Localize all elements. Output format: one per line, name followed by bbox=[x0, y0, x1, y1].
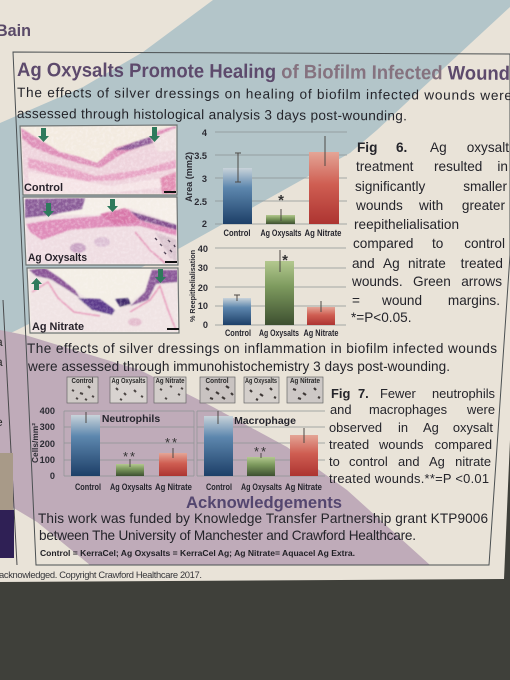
figure 6 caption bbox=[351, 140, 509, 325]
bar chart: neutrophils bbox=[30, 406, 194, 492]
figure 7 caption: treated bbox=[329, 437, 369, 452]
figure 6 caption: control bbox=[464, 236, 505, 251]
bar chart: reepithelialisation: * bbox=[282, 252, 288, 269]
bar chart: neutrophils: 100 bbox=[40, 455, 55, 465]
figure 6 caption: to bbox=[432, 236, 443, 251]
histology labels bbox=[24, 182, 87, 333]
bar chart: reepithelialisation: Ag Oxysalts bbox=[259, 328, 299, 338]
bar chart: neutrophils: Control bbox=[75, 482, 101, 492]
figure 6 caption: in bbox=[497, 159, 508, 174]
bar chart: neutrophils: 400 bbox=[40, 406, 55, 416]
bar chart: reepithelialisation: 20 bbox=[198, 283, 208, 293]
acknowledgements heading: Acknowledgements bbox=[186, 494, 342, 512]
bar chart: neutrophils: Neutrophils bbox=[102, 413, 160, 425]
main panel frame bbox=[13, 52, 510, 565]
acknowledgements text: between The University of Manchester and Crawford Healthcare. bbox=[39, 528, 416, 543]
figure 6 caption: Ag bbox=[430, 140, 447, 155]
histology image: ag oxysalts bbox=[23, 197, 178, 265]
bar chart: reepithelialisation: 40 bbox=[198, 244, 208, 254]
bar chart: reepithelialisation bbox=[188, 244, 346, 338]
figure 6 caption: reepithelialisation bbox=[354, 217, 459, 232]
bar chart: wound area: 2.5 bbox=[194, 197, 207, 207]
bar chart: wound area: Ag Nitrate bbox=[304, 228, 342, 238]
micrographs: neutrophils bbox=[67, 377, 186, 403]
bar chart: neutrophils: ** bbox=[123, 449, 137, 464]
micrographs: macrophages bbox=[200, 377, 323, 403]
histology labels: Ag Nitrate bbox=[32, 321, 84, 333]
histology image: control bbox=[20, 125, 178, 196]
figure 7 caption: and bbox=[398, 454, 420, 469]
bar chart: macrophage: Ag Nitrate bbox=[285, 482, 322, 492]
micrographs: macrophages: Ag Oxysalts bbox=[245, 378, 277, 385]
bar chart: wound area: 3.5 bbox=[194, 151, 207, 161]
figure 7 caption: Ag bbox=[429, 454, 445, 469]
figure 6 caption: arrows bbox=[461, 274, 502, 289]
bar chart: wound area: 4 bbox=[202, 128, 208, 138]
bar chart: wound area: Ag Oxysalts bbox=[260, 228, 302, 238]
figure 6 caption: with bbox=[418, 198, 443, 213]
acknowledgements text: This work was funded by Knowledge Transfer Partnership grant KTP9006 bbox=[38, 511, 488, 526]
histology labels: Control bbox=[24, 182, 63, 194]
scale bars bbox=[164, 191, 179, 330]
figure 7 caption: macrophages bbox=[369, 402, 447, 417]
intro text: histological analysis: assessed through histological analysis 3 days post-wounding. bbox=[17, 106, 407, 123]
figure 6 caption: significantly bbox=[355, 179, 425, 194]
figure 6 caption: Ag bbox=[383, 256, 400, 271]
bar chart: wound area: 2 bbox=[202, 219, 207, 229]
bar chart: neutrophils: Ag Nitrate bbox=[155, 482, 192, 492]
intro text: immunohistochemistry: were assessed through immunohistochemistry 3 days post-wounding. bbox=[27, 359, 450, 374]
figure 7 caption: oxysalt bbox=[453, 420, 493, 435]
bar chart: reepithelialisation: 30 bbox=[198, 263, 208, 273]
figure 6 caption: Green bbox=[413, 274, 451, 289]
figure 6 caption: treatment bbox=[356, 159, 414, 174]
histology labels: Ag Oxysalts bbox=[28, 252, 87, 264]
figure 6 caption: compared bbox=[353, 236, 413, 251]
dressing key: Control = KerraCel; Ag Oxysalts = KerraCel Ag; Ag Nitrate= Aquacel Ag Extra. bbox=[40, 548, 355, 558]
micrographs: macrophages: Control bbox=[206, 378, 229, 385]
figure 7 caption: Ag bbox=[423, 420, 439, 435]
intro text: histological analysis bbox=[17, 85, 510, 124]
green arrows marking wound margins bbox=[31, 127, 166, 290]
micrographs: neutrophils: Control bbox=[72, 378, 94, 385]
acknowledgements text bbox=[38, 511, 488, 543]
figure 6 caption: *=P<0.05. bbox=[351, 310, 411, 325]
bar chart: neutrophils: ** bbox=[165, 435, 179, 450]
figure 6 caption: nitrate bbox=[408, 256, 446, 271]
figure 6 caption: oxysalt bbox=[467, 140, 509, 155]
figure 7 caption: in bbox=[398, 420, 408, 435]
figure 6 caption: greater bbox=[462, 198, 505, 213]
bar chart: neutrophils: 200 bbox=[40, 439, 55, 449]
figure 7 caption: to bbox=[329, 454, 340, 469]
bar chart: reepithelialisation: Ag Nitrate bbox=[304, 328, 339, 338]
intro text: histological analysis: The effects of silver dressings on healing of biofilm infected wounds were bbox=[17, 85, 510, 103]
figure 7 caption: neutrophils bbox=[432, 386, 495, 401]
figure 6 caption: resulted bbox=[434, 159, 482, 174]
figure 7 caption: compared bbox=[435, 437, 492, 452]
figure 7 caption: and bbox=[330, 402, 352, 417]
bar chart: neutrophils: Cells/mm² bbox=[30, 423, 40, 463]
micrographs: macrophages: Ag Nitrate bbox=[290, 378, 320, 385]
figure 7 caption: wounds bbox=[378, 437, 423, 452]
bar chart: wound area bbox=[184, 128, 347, 238]
bar chart: reepithelialisation: % Reepithelialisation bbox=[188, 250, 197, 322]
copyright footer: acknowledged. Copyright Crawford Healthcare 2017. bbox=[0, 569, 202, 580]
figure 7 caption: 7. bbox=[358, 386, 369, 401]
bar chart: macrophage: ** bbox=[254, 444, 268, 459]
bar chart: macrophage: Ag Oxysalts bbox=[241, 482, 282, 492]
title: Ag Oxysalts Promote Healing of Biofilm Infected Wound bbox=[17, 59, 510, 85]
histology image: ag nitrate bbox=[27, 268, 179, 333]
figure 6 caption: = bbox=[352, 293, 360, 308]
bar chart: neutrophils: 0 bbox=[50, 471, 55, 481]
figure 7 caption: Fig bbox=[331, 386, 350, 401]
figure 6 caption: wound bbox=[381, 293, 422, 308]
bar chart: wound area: Control bbox=[224, 228, 250, 238]
bar chart: reepithelialisation: 10 bbox=[198, 301, 208, 311]
figure 7 caption: were bbox=[466, 402, 495, 417]
bar chart: macrophage: Control bbox=[206, 482, 232, 492]
figure 6 caption: 6. bbox=[396, 140, 407, 155]
figure 6 caption: margins. bbox=[448, 293, 500, 308]
figure 6 caption: smaller bbox=[463, 179, 507, 194]
figure 6 caption: Fig bbox=[357, 140, 377, 155]
bar chart: reepithelialisation: 0 bbox=[203, 320, 208, 330]
bar chart: macrophage: Macrophage bbox=[234, 415, 296, 427]
bar chart: reepithelialisation: Control bbox=[225, 328, 251, 338]
figure 6 caption: wounds bbox=[355, 198, 403, 213]
figure 6 caption: treated bbox=[461, 256, 503, 271]
bar chart: neutrophils: 300 bbox=[40, 422, 55, 432]
figure 6 caption: and bbox=[352, 256, 375, 271]
figure 7 caption: treated wounds.**=P <0.01 bbox=[329, 471, 489, 486]
figure 6 caption: wounds. bbox=[351, 274, 403, 289]
bar chart: wound area: Area (mm2) bbox=[184, 152, 195, 202]
figure 7 caption: observed bbox=[329, 420, 382, 435]
left neighbouring panel fragments bbox=[0, 300, 17, 565]
figure 7 caption bbox=[329, 386, 495, 486]
figure 7 caption: Fewer bbox=[380, 386, 417, 401]
figure 7 caption: nitrate bbox=[455, 454, 491, 469]
micrographs: neutrophils: Ag Nitrate bbox=[156, 378, 185, 385]
bar chart: wound area: * bbox=[278, 192, 284, 209]
bar chart: macrophage bbox=[197, 411, 325, 492]
bar chart: wound area: 3 bbox=[202, 174, 207, 184]
micrographs: neutrophils: Ag Oxysalts bbox=[112, 378, 146, 385]
figure 7 caption: control bbox=[349, 454, 388, 469]
intro text: immunohistochemistry bbox=[27, 341, 497, 374]
intro text: immunohistochemistry: The effects of silver dressings on inflammation in biofilm infected wounds bbox=[27, 341, 497, 356]
bar chart: neutrophils: Ag Oxysalts bbox=[110, 482, 152, 492]
